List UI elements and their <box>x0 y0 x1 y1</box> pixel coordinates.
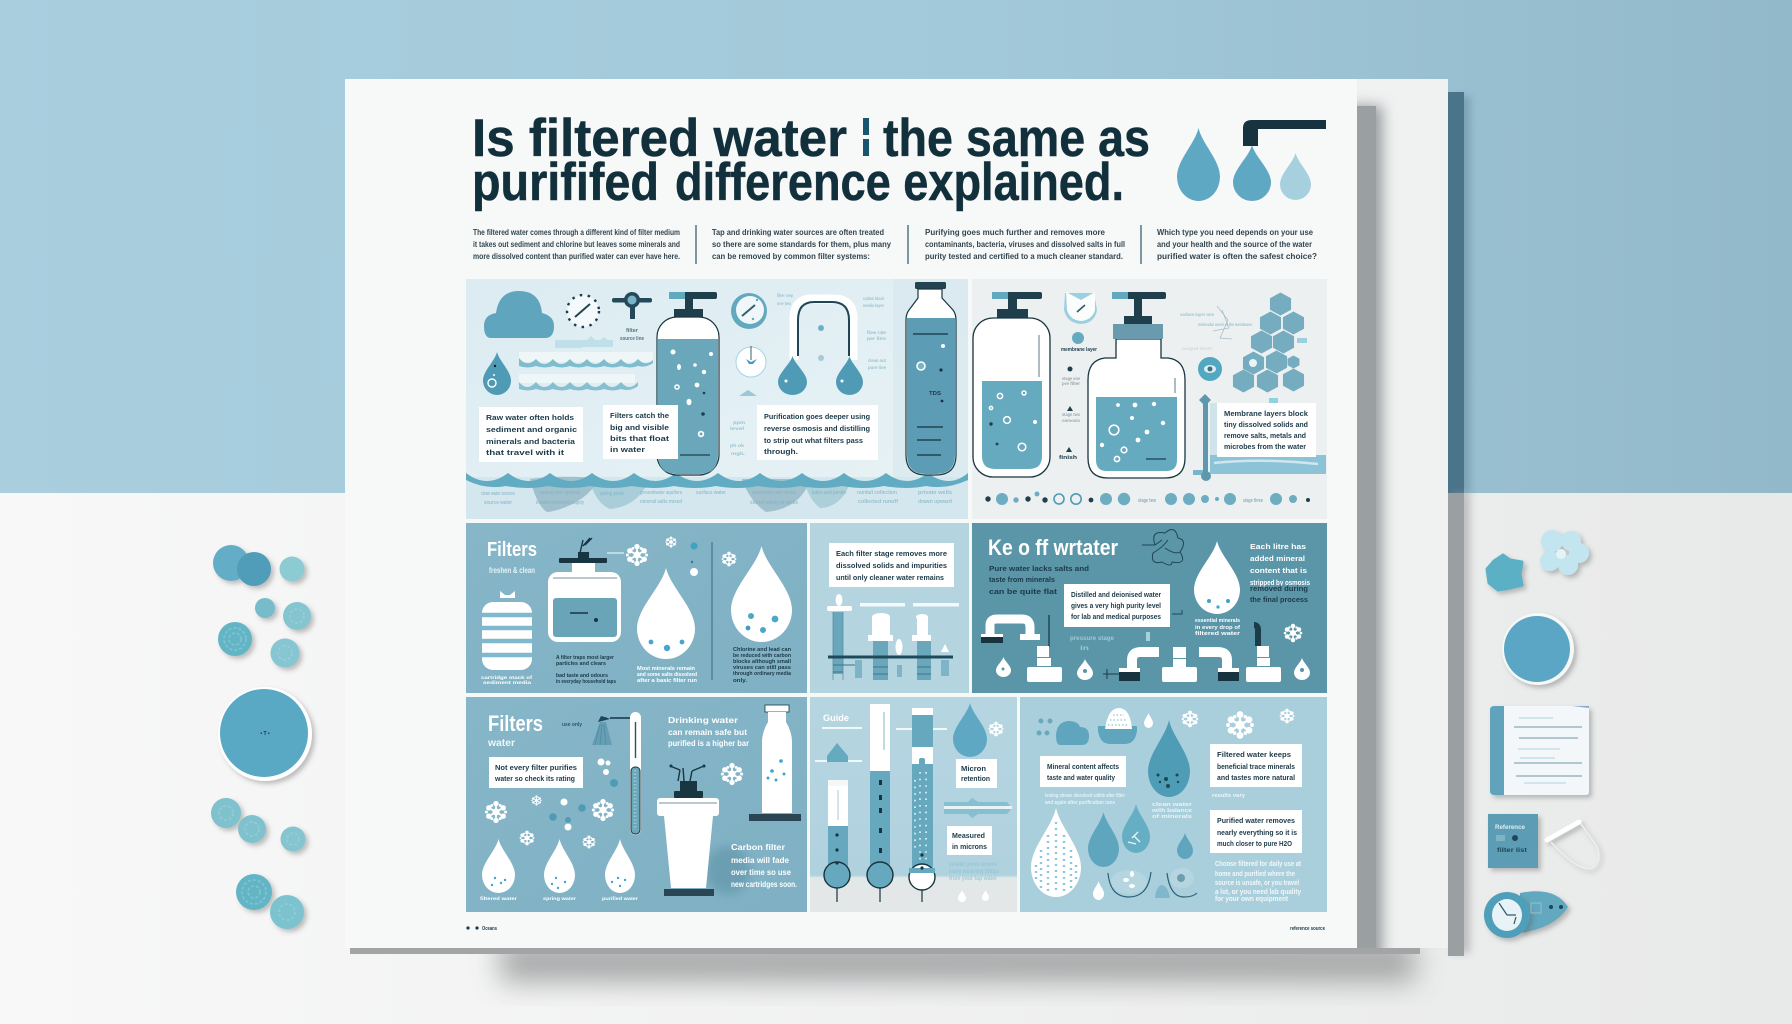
text box one: Micron <box>961 764 986 773</box>
pale marker <box>555 336 613 348</box>
subheading: freshen & clean <box>489 566 535 575</box>
text box B: bits that float <box>610 434 670 443</box>
small drops <box>958 890 989 902</box>
text box: Distilled and deionised water <box>1071 590 1161 599</box>
text box: Each filter stage removes more <box>836 549 947 558</box>
bottle A <box>973 292 1050 477</box>
waves lower <box>519 374 638 390</box>
caption under jar: bad taste and odours <box>556 673 608 679</box>
intro text: Pure water lacks salts and <box>989 564 1089 573</box>
text box: microbes from the water <box>1224 442 1306 451</box>
pale caption <box>1070 636 1115 652</box>
icon: cloud <box>484 291 554 338</box>
pale technical note <box>1180 306 1252 351</box>
small center legend: finish <box>1059 455 1077 461</box>
subheading: water <box>487 738 515 749</box>
prop: small square card: Reference <box>1495 824 1525 831</box>
caption under drop one <box>637 666 698 684</box>
pale lines center <box>1151 802 1192 820</box>
text box three: much closer to pure H2O <box>1217 839 1292 848</box>
intro text columns: The filtered water comes through a different kind of filter medium <box>473 227 680 237</box>
icon: snowflake cluster <box>485 758 743 848</box>
small center legend: pre filter <box>1062 381 1080 386</box>
white text block: source is unsafe, or you travel <box>1215 878 1299 887</box>
prop: large left disc: • T • <box>260 731 270 737</box>
bottom scalloped water: treated municipal supply <box>536 500 584 506</box>
text box one: taste and water quality <box>1047 773 1116 782</box>
title: purififed <box>472 153 659 212</box>
small caption: results vary <box>1212 793 1245 799</box>
title: the same as <box>883 109 1150 168</box>
title: difference explained. <box>675 153 1124 212</box>
icon: small drop <box>483 352 511 395</box>
small white caption: in every drop of <box>1195 625 1240 631</box>
heading: Filters <box>488 711 543 736</box>
text box two: Filtered water keeps <box>1217 750 1291 759</box>
three white drops <box>480 839 638 901</box>
bottom scalloped water: mineral salts mixed <box>640 499 682 505</box>
bottom scalloped water: natural river systems <box>540 490 580 496</box>
panel: drops row 3 right <box>1020 697 1327 912</box>
icon: dotted clock <box>567 295 599 327</box>
gauge <box>731 293 767 329</box>
text box: dissolved solids and impurities <box>836 561 947 570</box>
drop two <box>731 546 792 642</box>
prop: flower tablet <box>1540 530 1589 575</box>
text box B <box>603 405 678 459</box>
bottle B <box>1088 292 1185 478</box>
intro text columns <box>473 227 1317 261</box>
panel: filters row 3 left <box>466 697 807 912</box>
icon: plumbing pipes <box>981 615 1281 682</box>
text box C <box>757 405 878 460</box>
caption under jar: particles and clears <box>556 661 606 667</box>
tall bottle <box>906 282 956 475</box>
drop one <box>637 568 695 659</box>
text box <box>489 757 583 788</box>
bottom scalloped water: spring pools <box>600 491 624 497</box>
pale side labels: one two <box>777 301 791 306</box>
icon: shield clock <box>1064 292 1097 324</box>
text box <box>829 543 954 587</box>
text box B: in water <box>610 445 645 454</box>
small center legend: stage two <box>1062 412 1080 417</box>
intro text columns: purity tested and certified to a much cleaner standard. <box>925 251 1123 261</box>
small particles <box>665 536 698 576</box>
dotted progress row <box>985 492 1310 505</box>
icon: striped tank <box>481 591 533 685</box>
small white caption: essential minerals <box>1195 618 1240 624</box>
prop: large right disc <box>1502 613 1574 685</box>
big speckled drop <box>1031 808 1081 897</box>
bottom scalloped water: stored safely in tanks <box>750 500 798 506</box>
white text block bottom: new cartridges soon. <box>731 880 797 889</box>
text box: gives a very high purity level <box>1071 601 1161 610</box>
icon: snowflake <box>626 544 648 566</box>
heading: Ke o ff wrtater <box>988 535 1118 560</box>
pale lines left: testing shows dissolved solids after filter <box>1045 793 1125 799</box>
tube middle <box>867 704 893 902</box>
text box C: reverse osmosis and distilling <box>764 424 870 433</box>
right column text: stripped by osmosis <box>1250 578 1310 587</box>
pale caption: in <box>1080 646 1090 652</box>
text box C: through. <box>764 447 798 456</box>
intro text columns: Tap and drinking water sources are often treated <box>712 227 884 237</box>
caption under drop one: Most minerals remain <box>637 666 696 672</box>
bottom scalloped water: reservoirs and dams <box>752 490 796 496</box>
intro text columns: so there are some standards for them, plus many <box>712 239 891 249</box>
white text block <box>1215 859 1302 903</box>
pale side labels: filter step <box>777 293 793 298</box>
text box: Not every filter purifies <box>495 763 577 772</box>
intro text columns: Purifying goes much further and removes more <box>925 227 1105 237</box>
caption under jar: A filter traps most larger <box>556 655 615 661</box>
icon: valve <box>612 292 652 319</box>
small center legend: osmosis <box>1062 418 1080 423</box>
bottom scalloped water: lakes and ponds <box>812 490 846 496</box>
tube right <box>909 708 935 902</box>
back sheet <box>1357 79 1448 948</box>
panel: bottles comparison <box>972 279 1327 519</box>
intro text columns: purified water is often the safest choice? <box>1157 251 1317 261</box>
white text block top: purified is a higher bar <box>668 739 749 748</box>
tube left <box>824 780 850 902</box>
white text block bottom: over time so use <box>731 868 792 877</box>
panel: gauges row 3 middle <box>810 697 1017 912</box>
pale lines left: and again after purification runs <box>1045 800 1115 806</box>
text box A: that travel with it <box>486 448 565 457</box>
heading: Guide <box>823 713 849 723</box>
bottom scalloped water: drawn upward <box>918 499 952 505</box>
pale side labels: level <box>730 426 744 431</box>
pale side labels <box>730 293 887 456</box>
intro text columns: more dissolved content than purified water can ever have here. <box>473 251 680 261</box>
text box: Membrane layers block <box>1224 409 1309 418</box>
text box: until only cleaner water remains <box>836 573 944 582</box>
cloud small icons <box>1036 718 1089 745</box>
text box three: nearly everything so it is <box>1217 828 1297 837</box>
white text block: Choose filtered for daily use at <box>1215 859 1301 868</box>
white text block: for your own equipment <box>1215 894 1288 903</box>
prop: dial with leaf tag <box>1484 891 1568 938</box>
pale side labels: media layer <box>863 303 884 308</box>
main sheet <box>345 79 1357 948</box>
small center legend <box>1059 332 1098 461</box>
intro text: can be quite flat <box>989 587 1058 596</box>
footer left <box>466 926 497 932</box>
bowl with speckled dome <box>1098 708 1137 744</box>
caption under jar <box>556 655 616 685</box>
text box: for lab and medical purposes <box>1071 612 1161 621</box>
pale side labels: pure line <box>868 365 886 370</box>
text box C: to strip out what filters pass <box>764 436 863 445</box>
text box three <box>1210 810 1302 853</box>
icon: white drop <box>1194 541 1240 614</box>
right column text: content that is <box>1250 566 1307 575</box>
pale caption <box>949 862 1000 882</box>
prop: small square card <box>1488 814 1538 868</box>
text box <box>1064 584 1170 627</box>
white text block top <box>668 716 749 748</box>
pale side labels: clean out <box>868 358 886 363</box>
icon: molecule scribble <box>1142 529 1184 565</box>
small label: filter <box>626 328 638 334</box>
intro text columns: it takes out sediment and chlorine but leaves some minerals and <box>473 239 680 249</box>
intro text columns: Which type you need depends on your use <box>1157 227 1313 237</box>
intro text columns: can be removed by common filter systems: <box>712 251 870 261</box>
measure lines <box>815 728 947 761</box>
snowflakes <box>1182 709 1294 739</box>
small white caption: filtered water <box>1195 631 1240 637</box>
drop and snowflake <box>953 703 1003 757</box>
text box B: Filters catch the <box>610 411 669 420</box>
icon: eye circle <box>1198 357 1222 381</box>
pale side labels: mg/L <box>731 451 745 456</box>
pale lines center: clean water <box>1152 802 1192 808</box>
dark shadow strip behind back sheet <box>1448 92 1470 956</box>
caption under drop one: after a basic filter run <box>637 678 698 684</box>
small label: source line <box>620 336 644 342</box>
pale side labels: ph ok <box>730 443 745 448</box>
bottom scalloped water: groundwater aquifers <box>640 490 682 496</box>
caption under drop two: viruses can still pass <box>733 665 791 671</box>
text box two: Measured <box>952 831 985 840</box>
caption under drop two: blocks although small <box>733 659 791 665</box>
text box A: Raw water often holds <box>486 413 574 422</box>
text box one: Mineral content affects <box>1047 762 1119 771</box>
intro text: taste from minerals <box>989 575 1055 584</box>
pale side labels: ppm <box>733 420 745 425</box>
text box two <box>947 826 992 855</box>
prop: notebook <box>1490 706 1589 795</box>
three white drops: filtered water <box>480 896 517 901</box>
icon: snowflake two <box>722 552 736 566</box>
title <box>472 109 1150 212</box>
white text block bottom: media will fade <box>731 856 790 865</box>
pale side labels: per litre <box>867 336 887 341</box>
small white drop <box>1144 713 1153 728</box>
pale technical note: carbon layer one <box>1180 312 1214 317</box>
caption under drop two <box>733 647 792 684</box>
icon: snowflake and spades <box>996 624 1310 680</box>
connector <box>944 798 1012 818</box>
waves upper <box>519 352 653 368</box>
bottom scalloped water: rainfall collection <box>857 490 897 496</box>
text box three: Purified water removes <box>1217 816 1295 825</box>
pale lines center: of minerals <box>1152 814 1192 820</box>
prop: large left disc <box>218 687 312 781</box>
text box two: in microns <box>952 842 987 851</box>
footer left: Oceans <box>482 926 497 932</box>
small white drop <box>1093 881 1104 900</box>
icon: filter jar <box>548 538 624 642</box>
small white caption <box>1195 618 1240 637</box>
right column text <box>1250 542 1310 604</box>
caption under drop one: and some salts dissolved <box>637 672 697 678</box>
text box C: Purification goes deeper using <box>764 412 870 421</box>
pale caption: pressure stage <box>1070 636 1115 642</box>
vertical divider <box>711 542 713 680</box>
pale lines center: with balance <box>1151 808 1192 814</box>
bowls <box>1108 868 1197 898</box>
heading: Filters <box>487 539 537 561</box>
footer right: reference source <box>1290 926 1325 932</box>
icon: hexagon cluster <box>1233 292 1307 392</box>
caption under drop two: through ordinary media <box>733 671 792 677</box>
icon: shower tube <box>592 712 641 835</box>
big teal drop <box>1148 720 1190 797</box>
bottom scalloped water: collected runoff <box>858 499 898 505</box>
text box A: sediment and organic <box>486 425 577 434</box>
caption under drop two: be reduced with carbon <box>733 653 792 659</box>
small center legend: membrane layer <box>1061 347 1098 353</box>
prop: small square card: filter list <box>1497 848 1527 854</box>
small center legend: stage one <box>1062 376 1080 381</box>
pale lines left <box>1045 793 1125 806</box>
text box: water so check its rating <box>494 774 575 783</box>
pale caption: many more tiny things <box>949 869 1000 875</box>
pale technical note: molecular mesh of the membrane <box>1198 322 1252 327</box>
small label <box>620 328 644 342</box>
column dividers <box>696 225 1141 264</box>
white text block top: Drinking water <box>668 716 738 725</box>
prop: white clip loop <box>1547 822 1599 868</box>
panel: water sources <box>466 279 968 519</box>
pale side labels: flow rate <box>867 330 886 335</box>
small cone <box>827 743 848 762</box>
three white drops: purified water <box>602 896 638 901</box>
bottom scalloped water: private wells <box>918 490 952 496</box>
text box one <box>1040 756 1126 787</box>
teal drops <box>1088 804 1193 867</box>
white text block: a lot, or you need lab quality <box>1215 887 1302 896</box>
right column text: removed during <box>1250 584 1308 593</box>
panel: pipes row 2 middle <box>810 523 969 693</box>
text box: remove salts, metals and <box>1224 431 1306 440</box>
title: Is filtered water <box>472 109 847 168</box>
pale caption: smaller pores remove <box>949 862 998 868</box>
bottom scalloped water: source water <box>484 500 512 506</box>
white text block bottom <box>731 843 797 889</box>
text box <box>1217 403 1316 457</box>
caption under drop two: only. <box>733 678 748 684</box>
white text block top: can remain safe but <box>668 728 747 737</box>
three white drops: spring water <box>543 896 576 901</box>
caption under jar: in everyday household taps <box>556 679 616 685</box>
pale caption: from your tap water <box>949 876 998 882</box>
text box: tiny dissolved solids and <box>1224 420 1308 429</box>
caption under drop two: Chlorine and lead can <box>733 647 792 653</box>
floor shadow beneath the sheets <box>350 942 1420 982</box>
text box B: big and visible <box>610 423 669 432</box>
round timer <box>736 346 766 377</box>
text box two: beneficial trace minerals <box>1217 762 1295 771</box>
bottom scalloped water <box>466 473 968 519</box>
panel: key of water <box>972 523 1327 693</box>
icon: arch tube with two drops <box>778 299 863 395</box>
text box one <box>956 759 997 788</box>
tall bottle: TDS <box>929 391 942 397</box>
icon: filter pipes <box>827 594 959 680</box>
text box A: minerals and bacteria <box>486 437 576 446</box>
intro text <box>989 564 1089 596</box>
right column text: Each litre has <box>1250 542 1306 551</box>
right column text: added mineral <box>1250 554 1305 563</box>
tiny note: use only <box>562 722 582 728</box>
bottom scalloped water: surface water <box>696 490 726 496</box>
intro text columns: and your health and the source of the water <box>1157 239 1313 249</box>
text box two: and tastes more natural <box>1217 773 1295 782</box>
dotted progress row: stage three <box>1243 498 1263 504</box>
white text block bottom: Carbon filter <box>731 843 785 852</box>
right column text: the final process <box>1250 595 1308 604</box>
bottle one <box>657 292 719 475</box>
dotted progress row: stage two <box>1138 498 1156 504</box>
pale side labels: carbon block <box>863 296 884 301</box>
props: left tablets <box>211 545 311 929</box>
icon: faucet and three drops <box>1177 120 1326 201</box>
icon: filter cup <box>657 764 719 896</box>
bar and rod <box>1193 394 1326 481</box>
prop: star tablet <box>1487 555 1522 590</box>
icon: tall white bottle <box>749 705 801 821</box>
icon: striped tank: sediment media <box>483 680 532 685</box>
pale technical note: output level <box>1182 346 1212 351</box>
panel: filters row 2 left <box>466 523 807 693</box>
intro text columns: contaminants, bacteria, viruses and dissolved salts in full <box>925 239 1125 249</box>
white text block: home and purified where the <box>1215 869 1295 878</box>
icon: striped tank: cartridge stack of <box>481 675 533 680</box>
text box two <box>1210 744 1302 787</box>
text box one: retention <box>961 774 990 783</box>
bottom scalloped water: clean water sources <box>481 491 515 497</box>
text box A <box>479 407 583 462</box>
